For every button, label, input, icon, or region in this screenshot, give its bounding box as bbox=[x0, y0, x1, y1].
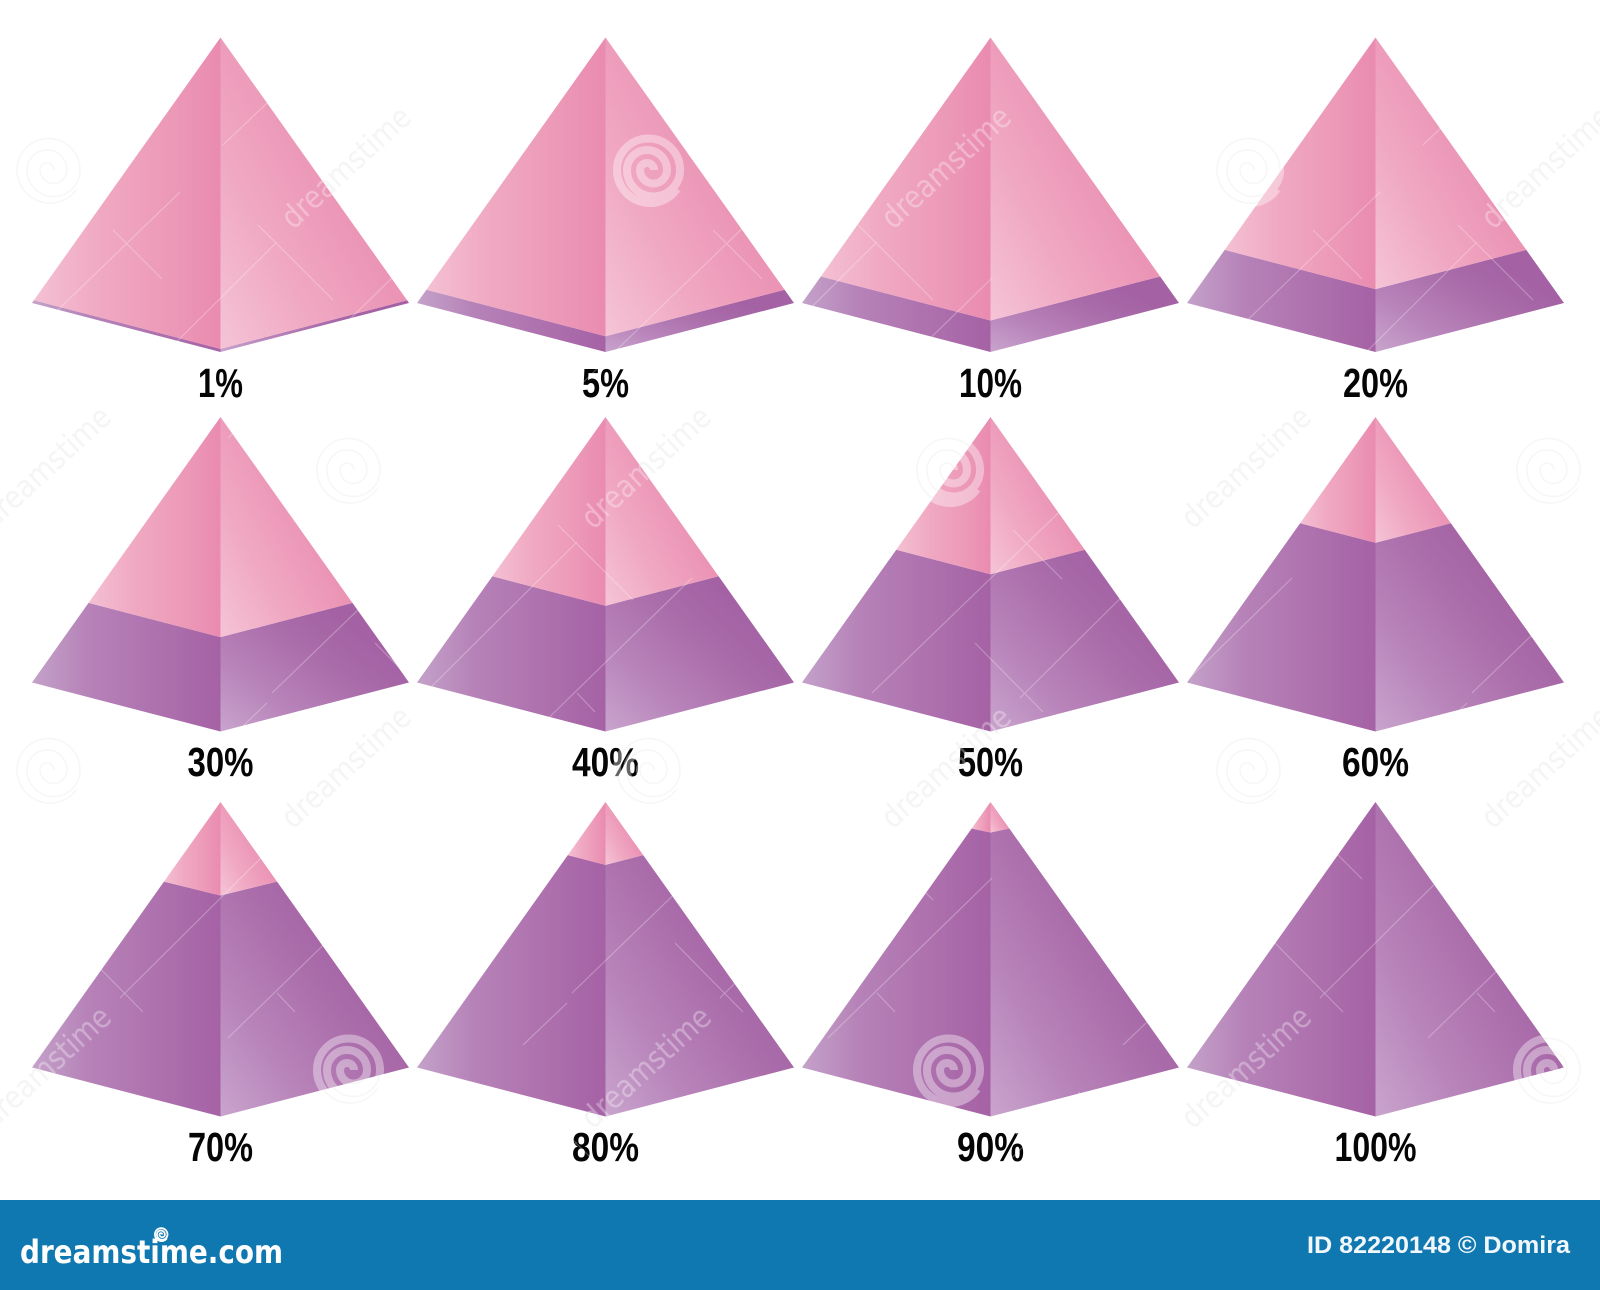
label 80%: 80% bbox=[572, 1124, 639, 1170]
watermark underlay on white background: dreamstime bbox=[1174, 399, 1319, 536]
watermark underlay on white background: dreamstime bbox=[874, 699, 1019, 836]
label 40%: 40% bbox=[572, 739, 639, 785]
pyramid 5% bbox=[417, 38, 794, 406]
label 90%: 90% bbox=[957, 1124, 1024, 1170]
watermark underlay on white background: dreamstime bbox=[274, 699, 419, 836]
pyramid 70% bbox=[32, 802, 409, 1170]
label 30%: 30% bbox=[188, 739, 254, 785]
label 1%: 1% bbox=[198, 360, 243, 406]
pyramid 50% bbox=[802, 417, 1179, 785]
label 50%: 50% bbox=[958, 739, 1023, 785]
pyramid 40% bbox=[417, 417, 794, 785]
watermark underlay on white background: dreamstime bbox=[274, 99, 419, 236]
label 70%: 70% bbox=[188, 1124, 253, 1170]
watermark underlay on white background: dreamstime bbox=[574, 999, 719, 1136]
label 5%: 5% bbox=[582, 360, 629, 406]
label 60%: 60% bbox=[1342, 739, 1409, 785]
watermark overlay: dreamstime bbox=[1174, 399, 1319, 536]
pyramid 60% bbox=[1187, 417, 1564, 785]
pyramid 90% bbox=[802, 802, 1179, 1170]
icon: logo spiral bbox=[155, 1228, 168, 1241]
label 20%: 20% bbox=[1343, 360, 1408, 406]
watermark overlay: dreamstime bbox=[874, 99, 1019, 236]
label 10%: 10% bbox=[959, 360, 1022, 406]
label 100%: 100% bbox=[1334, 1124, 1416, 1170]
watermark overlay: dreamstime bbox=[274, 699, 419, 836]
pyramid 1% bbox=[32, 38, 409, 406]
watermark underlay on white background: dreamstime bbox=[874, 99, 1019, 236]
watermark underlay on white background: dreamstime bbox=[574, 399, 719, 536]
watermark overlay: dreamstime bbox=[874, 699, 1019, 836]
pyramid 30% bbox=[32, 417, 409, 785]
footer bar bbox=[0, 1200, 1600, 1290]
watermark overlay: dreamstime bbox=[1174, 999, 1319, 1136]
pyramid 20% bbox=[1187, 38, 1564, 406]
pyramid 80% bbox=[417, 802, 794, 1170]
watermark overlay: dreamstime bbox=[274, 99, 419, 236]
watermark overlay: dreamstime bbox=[574, 999, 719, 1136]
watermark underlay on white background: dreamstime bbox=[1174, 999, 1319, 1136]
watermark overlay: dreamstime bbox=[574, 399, 719, 536]
pyramid 100% bbox=[1187, 802, 1564, 1170]
footer logo text: dreamstime.com bbox=[20, 1233, 283, 1271]
footer credit text: ID 82220148 © Domira bbox=[1307, 1232, 1570, 1259]
pyramid 10% bbox=[802, 38, 1179, 406]
